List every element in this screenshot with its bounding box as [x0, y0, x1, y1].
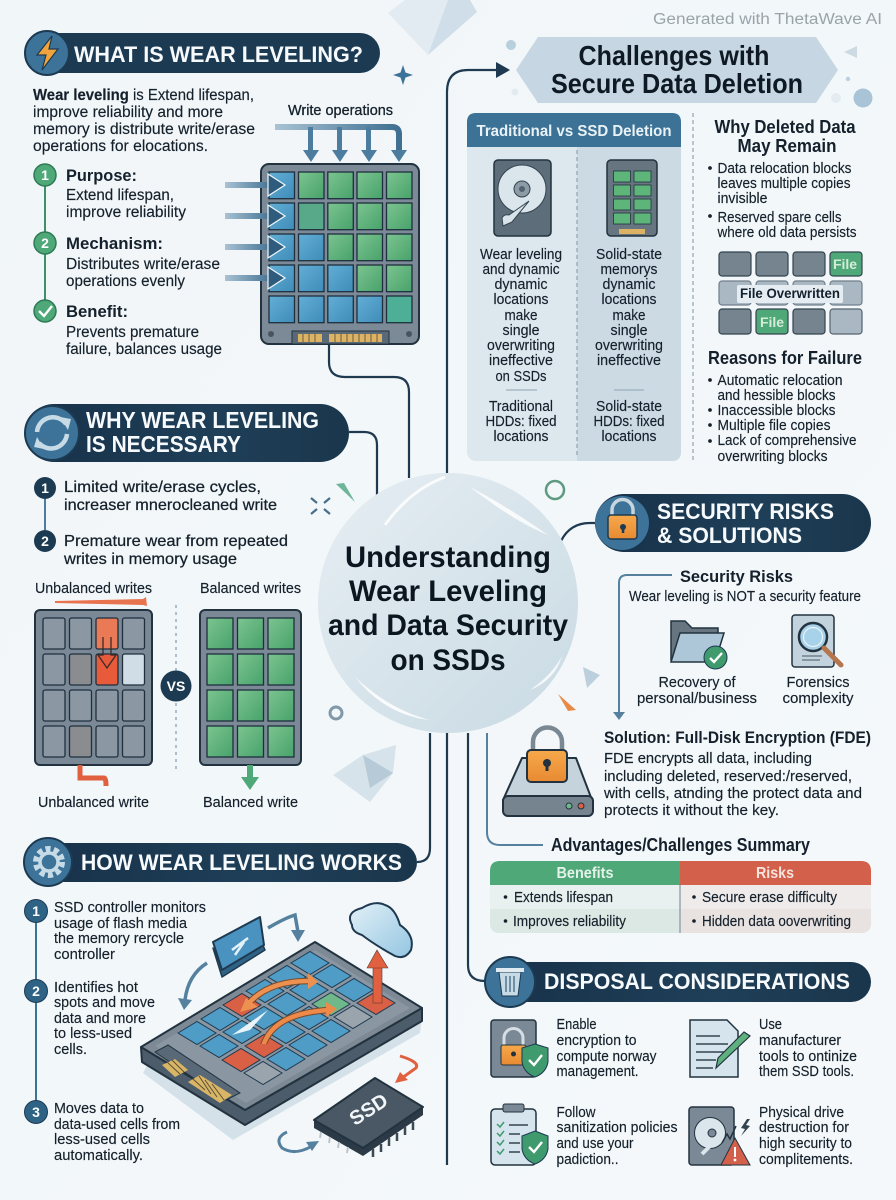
- divider: versus: VS: [167, 678, 185, 694]
- step list: purpose mechanism benefit: Distributes write/erase: [66, 256, 220, 273]
- list: reasons: Premature wear from repeated: [64, 533, 288, 550]
- text block: hdd column: HDDs: fixed: [486, 414, 556, 430]
- table: benefits and risks: Improves reliability: [513, 914, 627, 930]
- heading: challenges: [516, 37, 838, 103]
- text block: solution: with cells, atnding the protect data and: [603, 785, 862, 802]
- heading: security risks and solutions: & SOLUTIONS: [657, 523, 802, 548]
- text block: hdd column: make: [504, 308, 538, 324]
- list: reasons for failure: Inaccessible blocks: [718, 403, 836, 419]
- text: physical destruction: Physical drive: [759, 1105, 844, 1121]
- icon: forensics magnifier: [792, 615, 841, 667]
- text block: solution: [603, 728, 871, 819]
- text: sanitization policies: Follow: [556, 1105, 596, 1121]
- label: forensics: Forensics: [786, 675, 850, 691]
- step list: how it works: spots and move: [54, 995, 155, 1011]
- step list: how it works: usage of flash media: [54, 916, 188, 932]
- step list: how it works: automatically.: [54, 1148, 143, 1164]
- list: reasons: Limited write/erase cycles,: [64, 479, 261, 496]
- icon: ssd chip: [314, 1078, 423, 1157]
- text block: hdd column: on SSDs: [496, 369, 546, 385]
- title: and Data Security: [328, 609, 568, 642]
- arrow: orange to chip: [395, 1056, 417, 1083]
- step list: how it works: Moves data to: [54, 1101, 144, 1117]
- text block: ssd column: make: [612, 308, 646, 324]
- text: physical destruction: [759, 1105, 853, 1168]
- text block: ssd column: Solid-state: [596, 399, 662, 415]
- list: remaining data: [708, 161, 856, 241]
- text block: hdd column: overwriting: [487, 338, 555, 354]
- icon: hdd: [494, 160, 551, 236]
- arrows: writes from left: [225, 174, 285, 289]
- text: enable encryption: [556, 1017, 657, 1080]
- step list: how it works: less-used cells: [54, 1132, 150, 1148]
- text block: definition: improve reliability and more: [33, 104, 223, 121]
- step list: how it works: SSD controller monitors: [54, 900, 206, 916]
- text block: solution: including deleted, reserved:/reserved,: [604, 768, 852, 785]
- table: benefits and risks: [490, 861, 871, 933]
- text block: ssd column: locations: [602, 292, 656, 308]
- panel: why deleted data may remain: [693, 113, 862, 465]
- text: sanitization policies: sanitization policies: [556, 1120, 678, 1136]
- step list: purpose mechanism benefit: 2: [41, 235, 49, 251]
- title: on SSDs: [390, 644, 506, 677]
- illustration: isometric ssd: [141, 903, 423, 1157]
- list: reasons for failure: [708, 373, 856, 465]
- central hub: title orb: [318, 473, 578, 733]
- text block: ssd column: single: [610, 323, 648, 339]
- step list: purpose mechanism benefit: failure, balances usage: [66, 341, 222, 358]
- step list: how it works: controller: [54, 947, 115, 963]
- chart: balanced cell grid: [200, 610, 301, 765]
- label: balanced writes: Balanced writes: [200, 581, 301, 597]
- heading: what is wear leveling: WHAT IS WEAR LEVELING?: [74, 42, 363, 67]
- arrow: blue return: [279, 1132, 319, 1152]
- section: what is wear leveling: [25, 31, 419, 358]
- chart: unbalanced cell grid: [35, 610, 152, 765]
- panel: traditional vs ssd deletion: [467, 113, 681, 461]
- heading: security risks and solutions: [595, 494, 871, 552]
- text block: ssd column: Solid-state: [596, 247, 662, 263]
- step list: how it works: data-used cells from: [54, 1117, 180, 1133]
- label: unbalanced write: Unbalanced write: [38, 795, 149, 811]
- step list: purpose mechanism benefit: Benefit:: [66, 302, 128, 321]
- divider: versus: [160, 605, 192, 770]
- text: enable encryption: compute norway: [556, 1049, 657, 1065]
- step list: how it works: Identifies hot: [54, 980, 138, 996]
- arrow: green balanced: [241, 765, 259, 790]
- section: why wear leveling is necessary: [25, 404, 349, 811]
- step list: purpose mechanism benefit: Purpose:: [66, 166, 137, 185]
- section: challenges with secure data deletion: [467, 37, 862, 465]
- heading: reasons for failure: Reasons for Failure: [708, 348, 862, 368]
- list: reasons for failure: Lack of comprehensive: [718, 433, 856, 449]
- text: manufacturer tools: manufacturer: [759, 1033, 841, 1049]
- text block: ssd column: HDDs: fixed: [594, 414, 664, 430]
- heading: disposal considerations: DISPOSAL CONSIDERATIONS: [544, 969, 850, 994]
- label: unbalanced writes: Unbalanced writes: [35, 581, 152, 597]
- text block: hdd column: locations: [494, 292, 548, 308]
- title: Understanding: [345, 541, 551, 574]
- text: manufacturer tools: [759, 1017, 857, 1080]
- panel: why deleted data may remain: Why Deleted Data: [714, 117, 856, 137]
- icon: ssd board: [607, 160, 657, 236]
- text block: hdd column: Traditional: [489, 399, 553, 415]
- list: reasons for failure: and hessible blocks: [718, 388, 836, 404]
- text block: ssd column: dynamic: [602, 277, 656, 293]
- text block: hdd column: and dynamic: [482, 262, 560, 278]
- table: benefits and risks: Secure erase difficulty: [702, 890, 838, 906]
- list: reasons: writes in memory usage: [63, 551, 237, 568]
- step list: purpose mechanism benefit: operations evenly: [66, 273, 185, 290]
- heading: challenges: Challenges with: [578, 40, 770, 71]
- watermark: Generated with ThetaWave AI: [653, 11, 882, 28]
- text: sanitization policies: padiction..: [556, 1152, 618, 1168]
- list: remaining data: Data relocation blocks: [718, 161, 852, 177]
- arrow: up to cloud: [367, 950, 388, 1003]
- heading: how wear leveling works: HOW WEAR LEVELING WORKS: [81, 850, 402, 875]
- title: Wear Leveling: [349, 575, 547, 608]
- diagram: file overwritten blocks: File: [833, 256, 857, 272]
- heading: disposal considerations: [485, 957, 871, 1007]
- text block: definition: Wear leveling is Extend lifespan,: [33, 87, 254, 104]
- heading: how wear leveling works: [24, 838, 417, 886]
- label: balanced write: Balanced write: [203, 795, 298, 811]
- table: benefits and risks: Hidden data ooverwriting: [702, 914, 851, 930]
- icon: cloud: [350, 903, 412, 957]
- text block: ssd column: overwriting: [595, 338, 663, 354]
- label: forensics: [782, 675, 854, 707]
- text block: ssd column: memorys: [600, 262, 658, 278]
- icon: destroyed drive: [689, 1107, 750, 1165]
- label: recovery: Recovery of: [658, 675, 736, 691]
- text block: hdd column: [480, 247, 562, 445]
- decoration: sparkle: [393, 65, 413, 85]
- icon: lock and shield: [491, 1020, 548, 1077]
- list: remaining data: invisible: [718, 191, 768, 207]
- diagram: file overwritten blocks: File: [760, 314, 784, 330]
- title: [328, 541, 568, 677]
- label: recovery: [637, 675, 757, 707]
- list: reasons: [34, 477, 288, 568]
- decoration: small shapes around hub: [311, 481, 600, 802]
- text block: hdd column: dynamic: [494, 277, 548, 293]
- text block: hdd column: single: [502, 323, 540, 339]
- text block: definition: memory is distribute write/erase: [33, 121, 255, 138]
- list: reasons: increaser mnerocleaned write: [64, 497, 277, 514]
- diagram: file overwritten blocks: [719, 252, 862, 334]
- heading: security risks and solutions: SECURITY RISKS: [657, 499, 834, 524]
- decoration: top crystal: [388, 0, 477, 55]
- text: manufacturer tools: them SSD tools.: [759, 1064, 854, 1080]
- step list: purpose mechanism benefit: Mechanism:: [66, 234, 163, 253]
- arrows: write operations from top: [275, 127, 407, 162]
- arrows: data movement: [245, 981, 330, 1050]
- step list: purpose mechanism benefit: Extend lifespan,: [66, 187, 174, 204]
- decoration: dots near challenges: [506, 40, 872, 108]
- list: reasons: 2: [41, 533, 49, 549]
- step list: how it works: data and more: [54, 1011, 146, 1027]
- table: benefits and risks: Benefits: [556, 865, 614, 882]
- icon: encrypted drive: [503, 728, 593, 816]
- list: reasons for failure: Multiple file copies: [718, 418, 830, 434]
- icon: folder with check: [671, 621, 727, 669]
- text: physical destruction: complitements.: [759, 1152, 853, 1168]
- heading: why wear leveling is necessary: IS NECESSARY: [86, 431, 241, 457]
- text: sanitization policies: [556, 1105, 678, 1168]
- icon: document and pen: [690, 1020, 750, 1077]
- text: manufacturer tools: tools to ontinize: [759, 1049, 857, 1065]
- step list: how it works: [24, 900, 206, 1164]
- text block: hdd column: Wear leveling: [480, 247, 562, 263]
- text: physical destruction: destruction for: [759, 1120, 849, 1136]
- step list: how it works: 3: [32, 1104, 40, 1120]
- section: disposal considerations: [485, 957, 871, 1168]
- table: benefits and risks: Risks: [756, 865, 794, 882]
- arrows: controller flow: [185, 915, 298, 1000]
- section: how wear leveling works: [24, 838, 423, 1164]
- step list: how it works: 2: [32, 983, 40, 999]
- step list: how it works: the memory rercycle: [54, 931, 184, 947]
- text block: hdd column: ineffective: [489, 353, 553, 369]
- step list: purpose mechanism benefit: 1: [41, 167, 49, 183]
- step list: purpose mechanism benefit: Prevents premature: [66, 324, 199, 341]
- text block: ssd column: ineffective: [597, 353, 661, 369]
- heading: why wear leveling is necessary: [25, 404, 349, 462]
- text: physical destruction: high security to: [759, 1136, 852, 1152]
- step list: purpose mechanism benefit: [34, 164, 222, 358]
- list: reasons: 1: [41, 480, 49, 496]
- heading: challenges: Secure Data Deletion: [551, 68, 803, 99]
- text block: solution: protects it without the key.: [604, 802, 779, 819]
- list: reasons for failure: Automatic relocation: [718, 373, 842, 389]
- icon: clipboard and shield: [491, 1104, 548, 1165]
- text block: hdd column: locations: [494, 429, 548, 445]
- label: write operations: Write operations: [288, 103, 393, 119]
- step list: how it works: cells.: [54, 1042, 87, 1058]
- arrow: red unbalanced: [80, 765, 106, 786]
- panel: traditional vs ssd deletion: Traditional vs SSD Deletion: [476, 123, 672, 140]
- panel: why deleted data may remain: May Remain: [738, 136, 836, 156]
- heading: what is wear leveling: [25, 31, 380, 75]
- list: reasons for failure: overwriting blocks: [718, 449, 828, 465]
- step list: purpose mechanism benefit: improve reliability: [66, 204, 186, 221]
- heading: advantages challenges summary: Advantages/Challenges Summary: [551, 835, 810, 855]
- label: forensics: complexity: [782, 691, 854, 707]
- diagram: file overwritten blocks: File Overwritten: [740, 285, 840, 301]
- text block: ssd column: locations: [602, 429, 656, 445]
- icon: controller chip: [213, 917, 265, 977]
- table: benefits and risks: Extends lifespan: [514, 890, 613, 906]
- label: recovery: personal/business: [637, 691, 757, 707]
- text block: ssd column: [594, 247, 664, 445]
- icon: ssd chip: SSD: [346, 1090, 392, 1130]
- text: manufacturer tools: Use: [759, 1017, 782, 1033]
- list: remaining data: leaves multiple copies: [718, 176, 850, 192]
- section: security risks and solutions: [503, 494, 871, 819]
- list: remaining data: Reserved spare cells: [718, 210, 842, 226]
- connector lines to central hub: [329, 62, 598, 1165]
- list: remaining data: where old data persists: [717, 225, 856, 241]
- illustration: ssd memory grid: [261, 164, 419, 344]
- text block: solution: Solution: Full-Disk Encryption (FDE): [604, 728, 871, 747]
- step list: how it works: 1: [32, 903, 40, 919]
- text: sanitization policies: and use your: [556, 1136, 634, 1152]
- text block: definition: [33, 87, 255, 155]
- text: not a security feature: Wear leveling is NOT a security feature: [629, 589, 861, 605]
- heading: security risks: Security Risks: [680, 567, 793, 586]
- arrow: risks to solution: [613, 575, 672, 720]
- heading: why wear leveling is necessary: WHY WEAR LEVELING: [86, 407, 319, 433]
- text block: solution: FDE encrypts all data, including: [604, 750, 812, 767]
- connector pins: [155, 1045, 240, 1103]
- text: enable encryption: encryption to: [556, 1033, 636, 1049]
- arrow: orange unbalanced: [55, 597, 147, 606]
- text block: definition: operations for elocations.: [33, 138, 208, 155]
- text: enable encryption: Enable: [556, 1017, 596, 1033]
- step list: how it works: to less-used: [54, 1026, 132, 1042]
- text: enable encryption: management.: [556, 1064, 638, 1080]
